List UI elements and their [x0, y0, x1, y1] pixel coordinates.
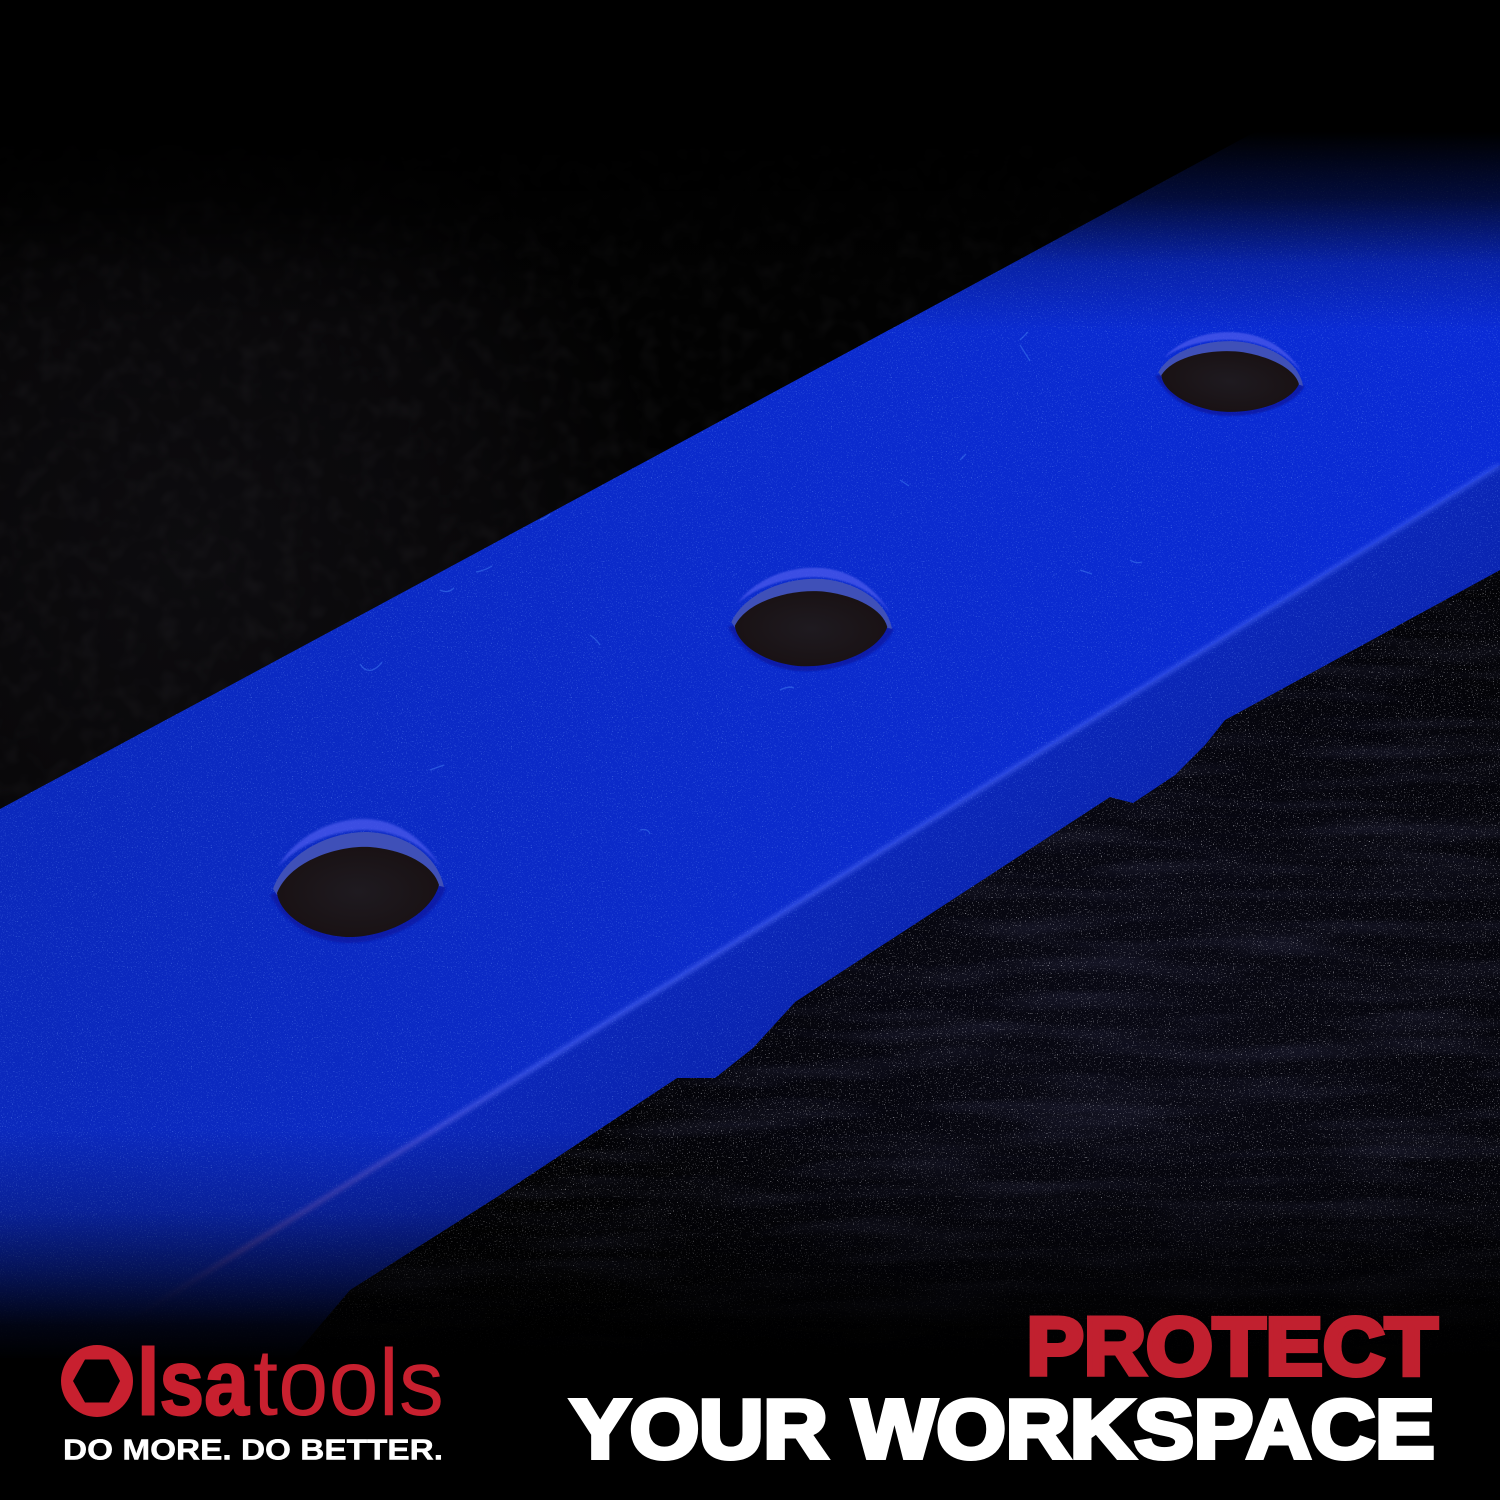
headline line: YOUR WORKSPACE: YOUR WORKSPACE [570, 1382, 1434, 1476]
background: dark fabric lower right with speckles [318, 571, 1500, 1340]
logo word: tools: tools [253, 1330, 444, 1436]
hole 3 (right) [1152, 324, 1310, 424]
logo: Olsatools with tagline [61, 1330, 444, 1466]
bottom black band [0, 1358, 1500, 1500]
top vignette fade [0, 0, 1500, 330]
hole 2 (centre) [726, 563, 897, 676]
headline [570, 1302, 1438, 1476]
crease highlight line [130, 465, 1500, 1320]
hole 1 (left) [270, 819, 446, 943]
logo word: lsa: lsa [137, 1330, 250, 1434]
strip lower bent band [312, 465, 1500, 1270]
icon: hex socket letter O [61, 1345, 133, 1417]
bottom vignette fade [0, 1130, 1500, 1360]
small scratches [360, 332, 1142, 834]
headline line: PROTECT: PROTECT [1026, 1302, 1438, 1392]
surface speckle texture [0, 175, 1500, 1314]
tagline: DO MORE. DO BETTER. [63, 1434, 443, 1466]
